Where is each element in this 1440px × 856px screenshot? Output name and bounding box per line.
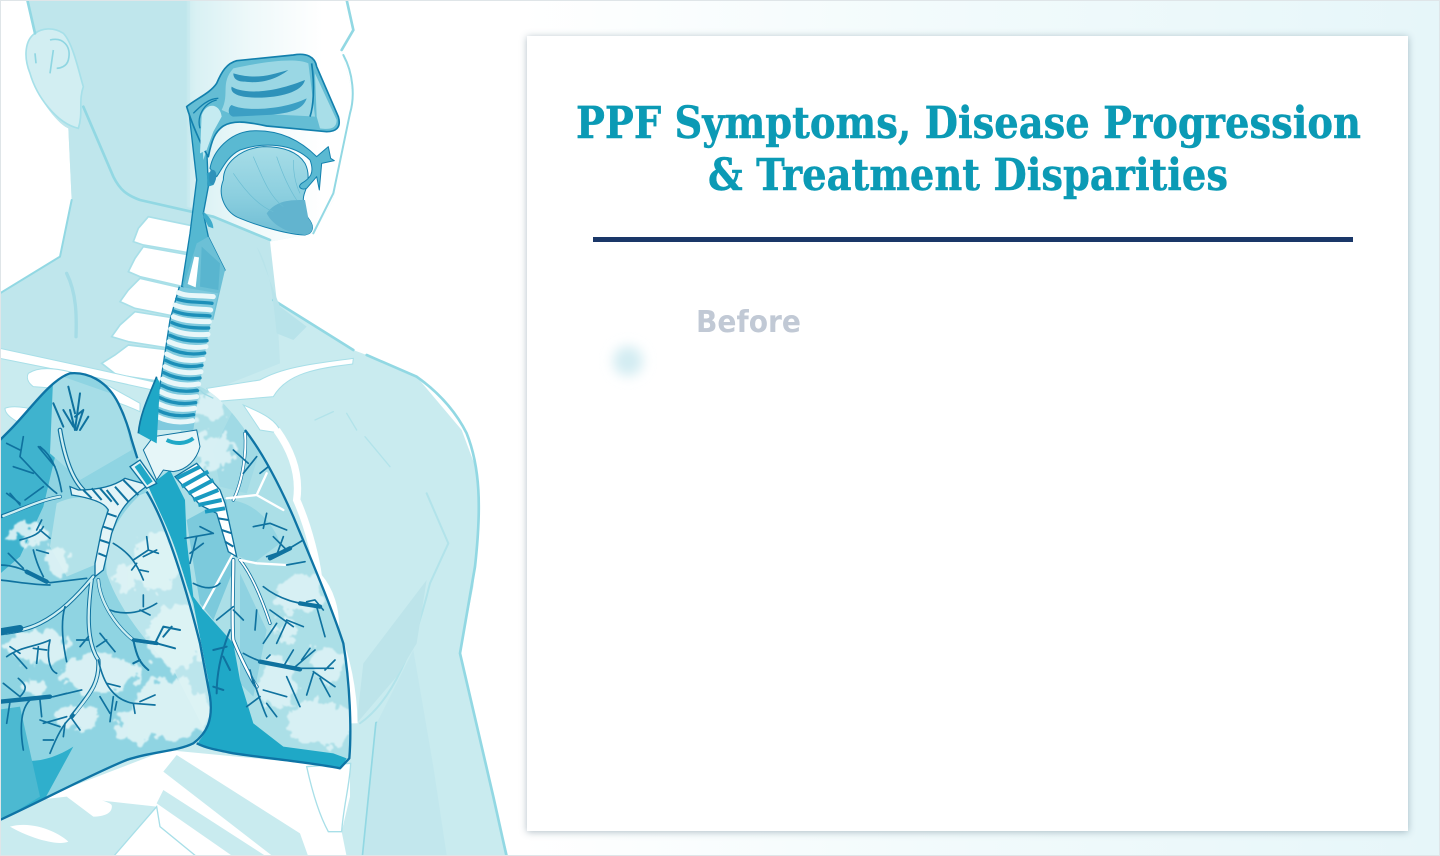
face highlight <box>187 0 353 242</box>
body contour lines <box>0 0 507 856</box>
right bronchial tree <box>233 433 270 687</box>
ribs below lungs <box>10 430 354 856</box>
alveolar mottling <box>7 523 210 743</box>
larynx white slot <box>188 257 199 287</box>
slide content <box>576 98 1361 380</box>
lungs <box>0 370 357 823</box>
carina <box>143 430 200 480</box>
title divider <box>593 237 1353 242</box>
trachea <box>138 287 218 443</box>
illustration: human respiratory system <box>1 1 508 855</box>
chest shading <box>357 580 427 723</box>
cervical vertebrae <box>102 217 197 382</box>
alveolar mottling <box>193 390 353 747</box>
pharynx and larynx <box>182 97 225 320</box>
title <box>576 98 1361 201</box>
left lung <box>0 370 220 823</box>
body silhouette <box>0 0 508 856</box>
ear <box>26 29 83 128</box>
left main bronchus <box>70 460 157 577</box>
left bronchial tree <box>0 430 157 717</box>
icon: faded dot <box>613 346 643 376</box>
right main bronchus <box>175 463 237 557</box>
title: & Treatment Disparities <box>708 150 1228 201</box>
tongue and palate <box>209 131 334 235</box>
lung outlines <box>0 373 350 820</box>
collarbones and upper ribs <box>0 348 353 433</box>
nasal cavity <box>187 54 339 157</box>
panel: main card <box>527 36 1408 831</box>
label: before: Before <box>696 305 801 340</box>
right lung <box>143 383 357 773</box>
neck shading <box>0 0 280 390</box>
